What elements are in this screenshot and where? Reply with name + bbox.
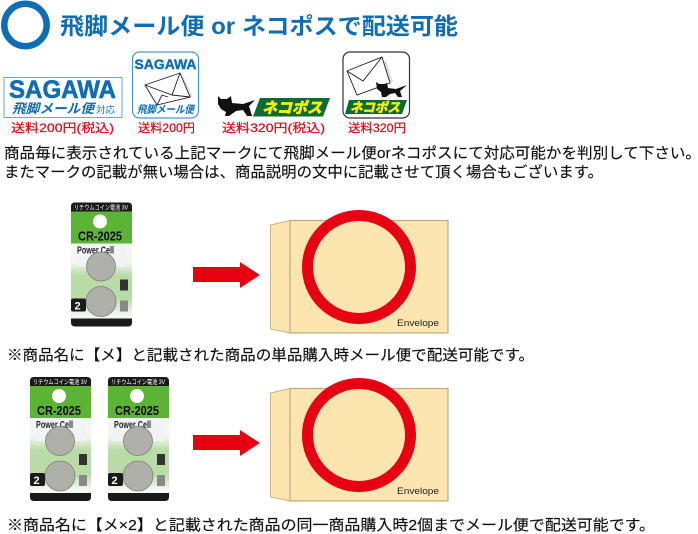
- envelope outline: [347, 57, 390, 95]
- mark green band: [345, 100, 407, 114]
- pack lower pattern: [30, 437, 91, 489]
- pack bottom band: [71, 318, 132, 326]
- coin cell bottom: [86, 286, 116, 316]
- mark wordmark: SAGAWA: [134, 56, 196, 72]
- coin cell bottom: [123, 461, 153, 491]
- pack count: 2: [74, 300, 81, 312]
- pack bottom band: [108, 493, 169, 501]
- note 1: ※商品名に【メ】と記載された商品の単品購入時メール便で配送可能です。: [7, 347, 534, 364]
- pack brand name: Power Cell: [36, 420, 73, 431]
- envelope shadow: [360, 60, 393, 94]
- red ring: [308, 216, 410, 318]
- envelope with red circle: [270, 216, 448, 333]
- coin cell bottom: [45, 461, 75, 491]
- title: 飛脚メール便 or ネコポスで配送可能: [60, 13, 458, 39]
- logo text: ネコポス: [262, 99, 323, 117]
- pack top label: リチウムコイン電池 3V: [111, 377, 166, 386]
- pack green header: [71, 210, 132, 244]
- pack green header: [30, 385, 91, 418]
- price label: Nekopos mark: 送料320円: [348, 120, 406, 135]
- envelope flap: [270, 388, 290, 501]
- pack top band: [30, 377, 91, 386]
- pack bottom band: [30, 493, 91, 501]
- pack small icon lower: [120, 300, 128, 312]
- arrow: [193, 430, 260, 456]
- pack count: 2: [34, 475, 40, 487]
- pack small icon upper: [157, 454, 165, 465]
- envelope outline: [145, 73, 190, 105]
- envelope label: Envelope: [397, 486, 439, 497]
- envelope flap: [270, 220, 290, 333]
- coin cell top: [86, 252, 116, 281]
- logo wordmark: SAGAWA: [9, 76, 116, 104]
- pack model number: CR-2025: [78, 230, 122, 244]
- logo green band: [253, 98, 330, 116]
- description line 2: またマークの記載が無い場合は、商品説明の文中に記載させて頂く場合もございます。: [4, 163, 603, 181]
- icon: black cat: [218, 96, 255, 116]
- icon: blue circle: [4, 4, 47, 46]
- logo suffix: 対応: [96, 104, 115, 115]
- pack count badge: [108, 473, 123, 486]
- pack brand name: Power Cell: [114, 420, 151, 431]
- envelope shadow: [160, 76, 193, 104]
- description line 1: 商品毎に表示されている上記マークにて飛脚メール便orネコポスにて対応可能かを判別して下さい。: [4, 145, 698, 162]
- pack small icon upper: [79, 454, 87, 465]
- arrow: [193, 262, 260, 288]
- text block: description: [4, 145, 698, 181]
- red ring: [308, 384, 410, 486]
- pack hanger hole: [130, 389, 144, 403]
- product: battery pack, left of pair: [30, 377, 91, 501]
- pack model number: CR-2025: [37, 404, 81, 418]
- note 2: ※商品名に【メ×2】と記載された商品の同一商品購入時2個までメール便で配送可能です。: [7, 517, 655, 534]
- pack small icon upper: [120, 280, 128, 290]
- price label: SAGAWA 200: 送料200円(税込): [11, 120, 114, 135]
- pack green header: [108, 385, 169, 418]
- pack top band: [108, 377, 169, 386]
- pack hanger hole: [52, 389, 66, 403]
- pack count: 2: [112, 475, 118, 487]
- coin cell top: [124, 426, 152, 456]
- pack model number: CR-2025: [115, 404, 159, 418]
- envelope with red circle: [270, 384, 448, 501]
- product: battery pack, right of pair: [108, 377, 169, 501]
- envelope label: Envelope: [397, 318, 439, 329]
- pack count badge: [71, 298, 86, 312]
- pack top band: [71, 202, 132, 212]
- pack hanger hole: [93, 214, 107, 228]
- icon: small black cat: [376, 82, 407, 97]
- envelope body: [290, 220, 448, 333]
- pack white window: [76, 244, 127, 266]
- product: battery pack, single: [71, 202, 132, 326]
- mark service name: 飛脚メール便: [137, 104, 196, 116]
- pack brand name: Power Cell: [77, 246, 114, 256]
- envelope body: [290, 388, 448, 501]
- mark text: ネコポス: [350, 100, 401, 115]
- price label: SAGAWA mark: 送料200円: [138, 120, 195, 135]
- pack white window: [35, 418, 86, 441]
- pack small icon lower: [79, 475, 87, 486]
- icon: SAGAWA envelope mark: [132, 52, 198, 118]
- price label: Nekopos 320: 送料320円(税込): [222, 120, 325, 135]
- pack lower pattern: [71, 262, 132, 314]
- pack small icon lower: [157, 475, 165, 486]
- icon: Nekopos envelope mark: [343, 52, 410, 118]
- logo: Nekopos horizontal: [218, 96, 330, 117]
- pack count badge: [30, 473, 45, 486]
- pack top label: リチウムコイン電池 3V: [33, 377, 88, 386]
- logo: SAGAWA horizontal: [4, 76, 122, 118]
- coin cell top: [46, 426, 74, 456]
- pack lower pattern: [108, 437, 169, 489]
- pack white window: [113, 418, 164, 441]
- logo service name: 飛脚メール便: [12, 101, 96, 116]
- pack top label: リチウムコイン電池 3V: [74, 202, 129, 212]
